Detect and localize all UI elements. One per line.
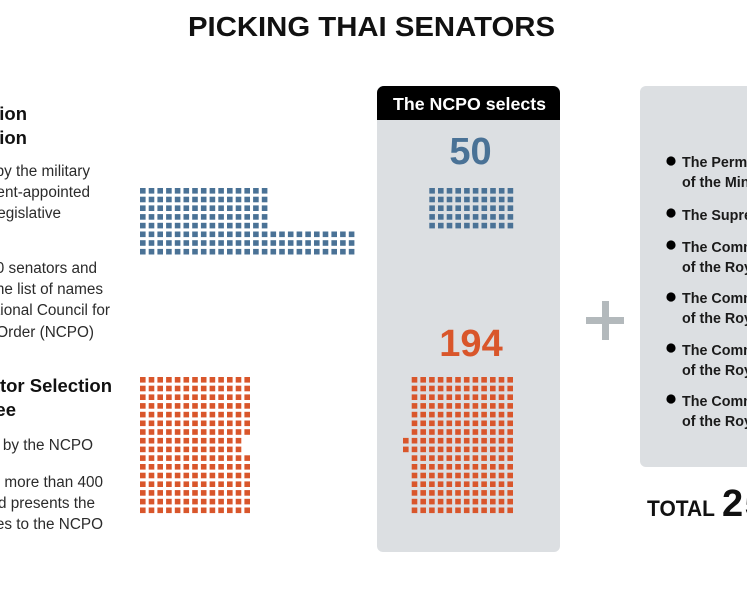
list item: police [666, 394, 747, 430]
list item: air force [666, 343, 747, 379]
unit chart: blue squares [140, 188, 354, 254]
number: 50: 50 [449, 131, 492, 173]
number: 194: 194 [439, 323, 503, 365]
description: selection role [0, 474, 103, 533]
description: role [0, 260, 110, 341]
title: PICKING THAI SENATORS [188, 11, 555, 42]
unit chart: blue 50 squares [429, 188, 513, 228]
panel background [377, 86, 560, 552]
icon: plus sign [586, 301, 624, 340]
total [647, 483, 747, 525]
description: appointment [0, 163, 90, 222]
header text: The NCPO selects [393, 94, 546, 114]
panel: ex-officio members [640, 86, 747, 467]
list item: army [666, 240, 747, 276]
panel header [377, 86, 560, 120]
heading: senator selection committee [0, 375, 112, 420]
panel: the NCPO selects [377, 86, 560, 552]
text block: nomination commission [0, 103, 110, 341]
unit chart: orange 194 squares [403, 377, 513, 513]
panel background [640, 86, 747, 467]
list item: navy [666, 291, 747, 327]
text block: senator selection committee [0, 375, 112, 533]
list item: defence [666, 155, 747, 191]
heading: nomination commission [0, 103, 27, 148]
total: TOTAL [647, 496, 715, 521]
unit chart: orange squares [140, 377, 250, 513]
